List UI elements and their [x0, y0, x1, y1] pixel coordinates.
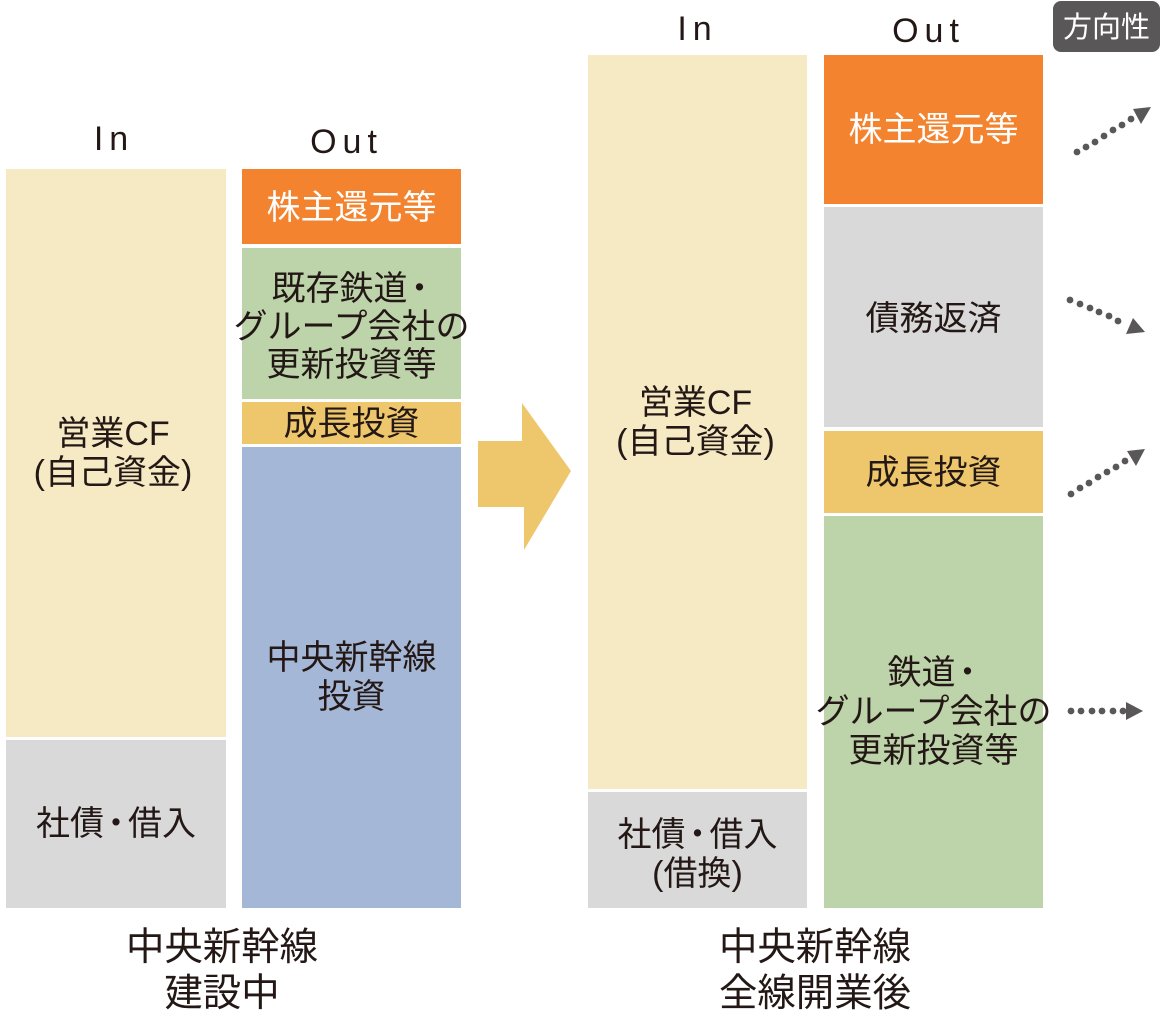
- label: renewal investment left: [234, 270, 469, 384]
- label: operating CF left: 営業CF: [56, 415, 170, 453]
- caption: during construction: 中央新幹線: [126, 926, 318, 969]
- label: growth investment right: 成長投資: [866, 454, 1002, 492]
- badge: direction: 方向性: [1063, 12, 1150, 44]
- label: operating CF left: (自己資金): [34, 454, 192, 492]
- label: railway and group renewal right: [816, 654, 1051, 770]
- label: railway and group renewal right: 鉄道・: [888, 654, 984, 692]
- label: growth investment left: 成長投資: [284, 405, 420, 443]
- badge: direction: [1053, 1, 1160, 52]
- label: shareholder returns right: 株主還元等: [848, 111, 1018, 149]
- block: debt repayment: [824, 207, 1043, 427]
- label: operating CF right: [616, 384, 775, 461]
- label: renewal investment left: グループ会社の: [234, 308, 469, 346]
- block: renewal investment: [242, 248, 461, 399]
- block: bonds and loans: [6, 740, 226, 908]
- block: shareholder returns: [824, 55, 1043, 204]
- block: shareholder returns: [242, 169, 461, 244]
- block: operating CF: [6, 169, 226, 737]
- label: Chuo Shinkansen investment: 投資: [318, 678, 386, 716]
- label: operating CF right: 営業CF: [639, 384, 752, 422]
- panel: after opening Out column: [824, 55, 1043, 908]
- label: debt repayment: 債務返済: [866, 300, 1002, 338]
- panel: construction period Out column: [242, 169, 461, 908]
- label: shareholder returns left: 株主還元等: [266, 189, 436, 227]
- block: railway and group renewal investment: [824, 516, 1043, 908]
- label: railway and group renewal right: 更新投資等: [848, 732, 1018, 770]
- block: operating CF: [588, 55, 807, 789]
- label: bonds and loans left: 社債・借入: [36, 805, 196, 843]
- heading: left In: In: [94, 120, 134, 158]
- label: railway and group renewal right: グループ会社の: [816, 693, 1051, 731]
- label: renewal investment left: 更新投資等: [266, 346, 436, 384]
- heading: right In: In: [677, 10, 718, 48]
- caption: after full opening: [719, 926, 911, 1012]
- caption: during construction: [126, 926, 318, 1012]
- panel: construction period In column: [6, 169, 226, 908]
- label: Chuo Shinkansen investment: 中央新幹線: [266, 639, 436, 677]
- label: operating CF right: (自己資金): [616, 423, 775, 461]
- label: bonds and loans refinancing: [618, 816, 778, 893]
- block: Chuo Shinkansen investment: [242, 447, 461, 908]
- label: Chuo Shinkansen investment: [266, 639, 436, 716]
- panel: after opening In column: [588, 55, 807, 908]
- heading: left Out: Out: [310, 123, 383, 161]
- heading: right Out: Out: [892, 12, 965, 50]
- block: growth investment: [242, 402, 461, 444]
- label: renewal investment left: 既存鉄道・: [272, 270, 436, 308]
- block: bonds and loans refinancing: [588, 792, 807, 908]
- caption: after full opening: 中央新幹線: [719, 926, 911, 969]
- label: operating CF left: [34, 415, 192, 492]
- label: bonds and loans refinancing: 社債・借入: [618, 816, 778, 854]
- label: bonds and loans refinancing: (借換): [652, 855, 743, 893]
- block: growth investment: [824, 431, 1043, 513]
